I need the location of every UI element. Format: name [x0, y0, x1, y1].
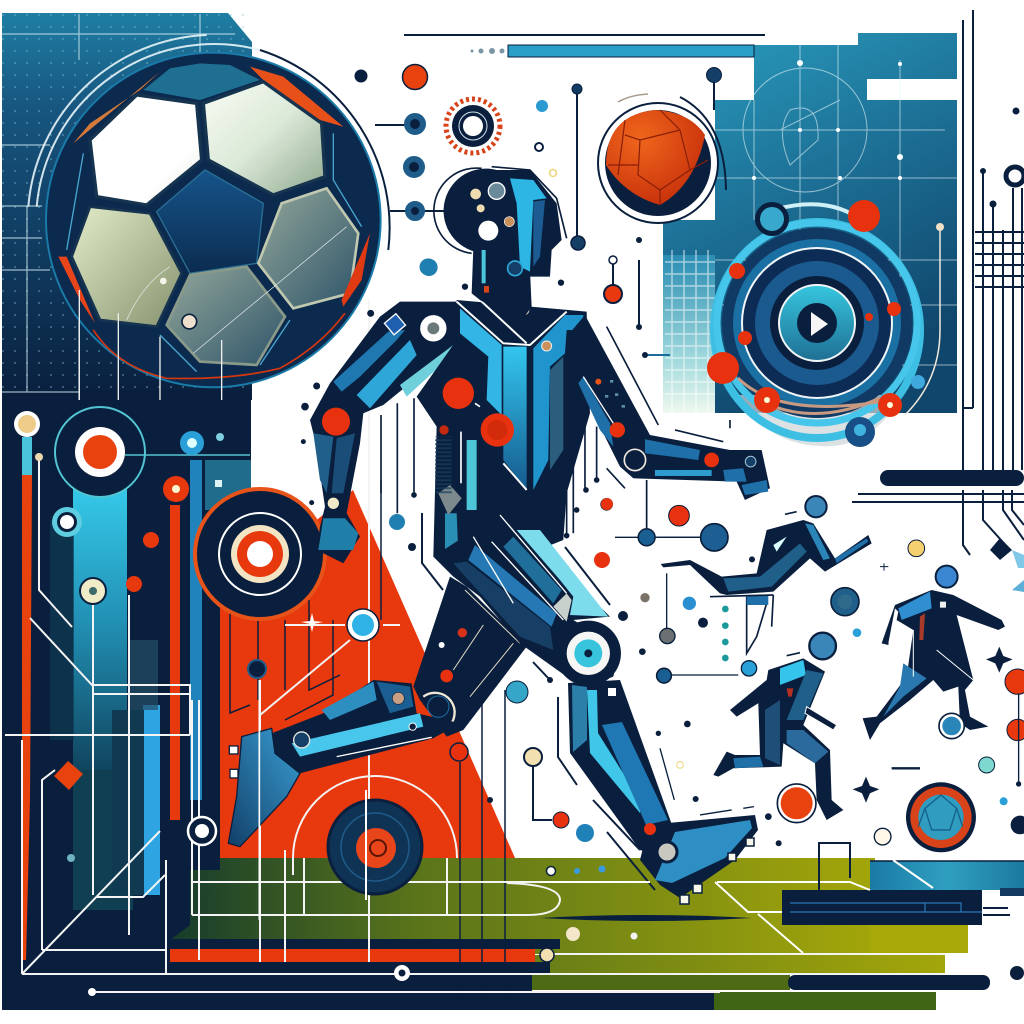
player: dribbling: [713, 633, 843, 823]
icon: globe ball lower right: [906, 782, 976, 852]
robot: front thigh: [433, 513, 620, 687]
robot: front boot: [640, 815, 758, 904]
top nodes: [354, 35, 765, 358]
node: blue circle on red: [248, 609, 379, 678]
robot: rear boot: [228, 680, 300, 920]
goal frame: [819, 843, 850, 890]
right side bar: [880, 108, 1024, 592]
robot: front shin: [568, 680, 672, 860]
robot: main figure: [302, 167, 770, 567]
robot: torso: [417, 300, 590, 557]
robot: legs: [413, 513, 621, 737]
robot: neck and head: [434, 167, 567, 323]
player: running: [661, 496, 872, 653]
icon: red ball top: [598, 94, 726, 223]
lower centre nodes and lines: [389, 498, 655, 890]
panel: left navy column: [2, 13, 714, 1010]
pitch player shadow: [540, 915, 752, 962]
robot: knee front: [556, 621, 621, 686]
robot: front shin and boot: [568, 680, 758, 904]
right side circuit lines: [852, 10, 1024, 555]
icon: large target: [195, 489, 325, 619]
small players group: [638, 480, 1024, 852]
robot: front arm: [567, 315, 770, 500]
robot: rear shin: [272, 680, 460, 773]
panel: left column colored bars: [22, 437, 535, 962]
panel: red triangle backdrop: [220, 490, 515, 858]
robot: rear thigh: [413, 577, 527, 737]
pitch markings: [540, 860, 933, 953]
left column nodes and circuit lines: [5, 300, 945, 1000]
icon: video play target: [707, 200, 944, 447]
lower right pitch blocks: [782, 861, 1024, 990]
robot: node dots around arm: [390, 259, 728, 567]
panel: right teal panel: [663, 33, 957, 413]
grid lines on top-left panel: [2, 14, 235, 400]
icon: lower ball: [328, 790, 422, 900]
robot: rear shin and boot: [228, 680, 460, 920]
icon: soccer ball: [28, 35, 390, 400]
icon: small target top: [446, 99, 500, 153]
robot: arm drip lines: [302, 280, 730, 549]
player: kicking: [863, 566, 1005, 740]
robot: rear arm: [310, 302, 463, 563]
panel: pitch green field: [170, 858, 968, 1010]
scattered nodes: [638, 480, 1024, 846]
